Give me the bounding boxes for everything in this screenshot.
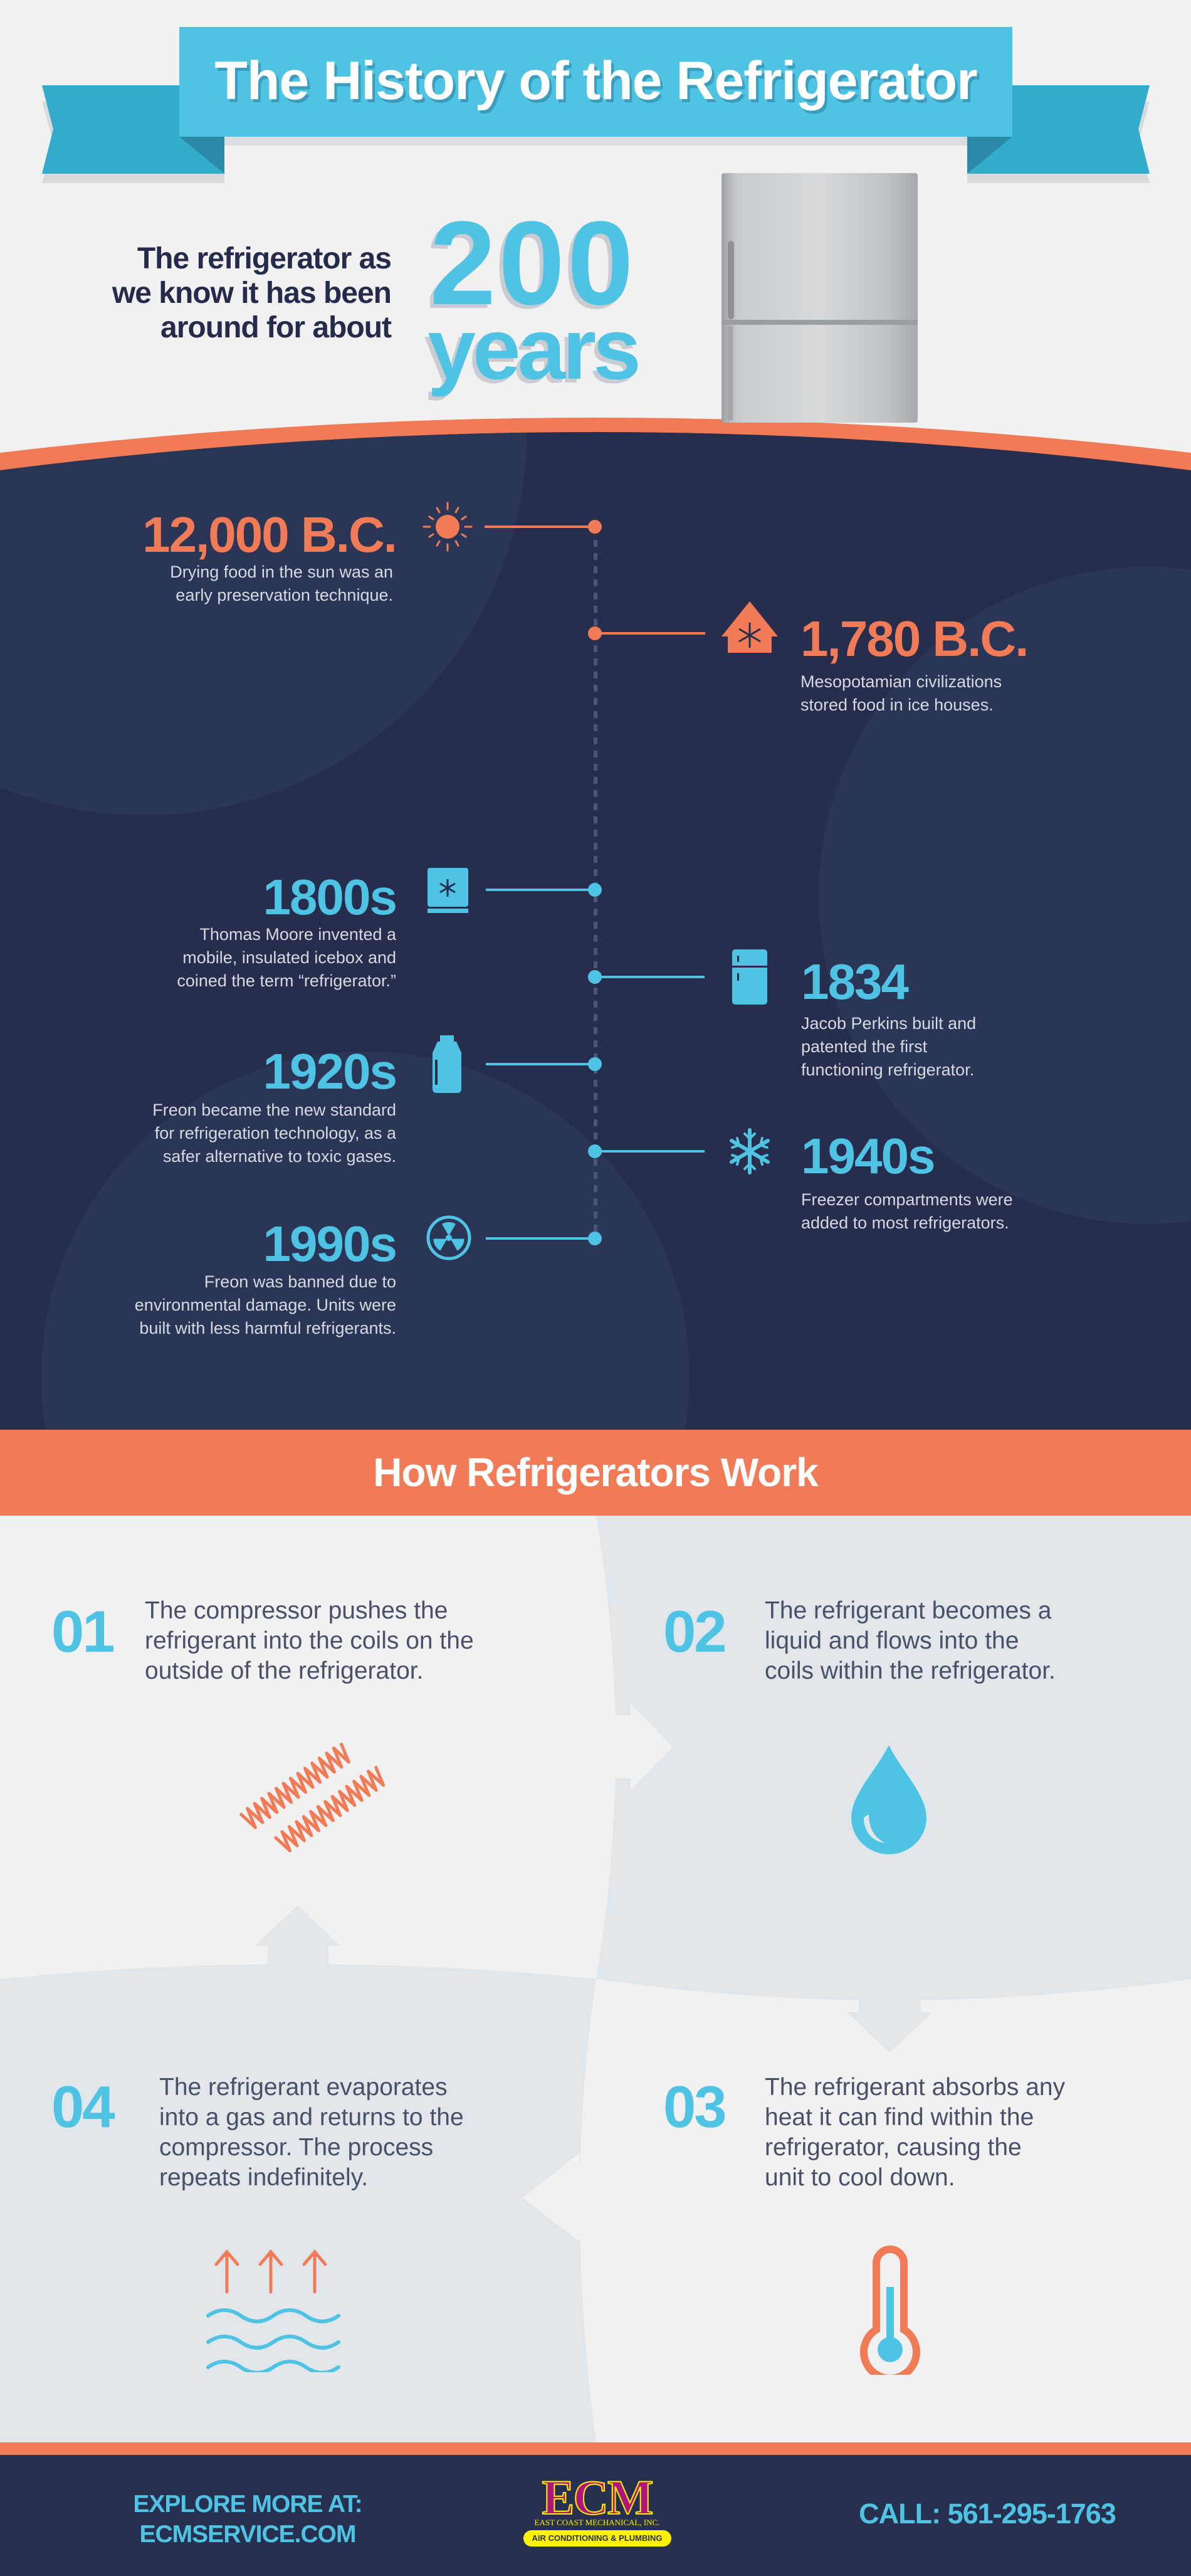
arrow: down bbox=[847, 1994, 933, 2052]
event: 1920s: Freon became the new standard bbox=[152, 1101, 396, 1119]
logo: ECM: ECM bbox=[542, 2470, 652, 2525]
big number: 200 years bbox=[424, 197, 638, 401]
event: 12,000 B.C. bbox=[142, 502, 602, 604]
step 04: compressor. The process bbox=[159, 2134, 433, 2161]
step 02 bbox=[663, 1597, 1056, 1854]
event: 12,000 B.C.: early preservation technique. bbox=[176, 586, 393, 604]
event: 12,000 B.C.: 12,000 B.C. bbox=[142, 507, 396, 562]
navy timeline background bbox=[0, 418, 1191, 1430]
event: 1834 bbox=[588, 949, 976, 1079]
process background quadrants and arrows bbox=[0, 1516, 1191, 2442]
event: 1990s: environmental damage. Units were bbox=[135, 1296, 396, 1314]
event: 1800s: 1800s bbox=[263, 869, 396, 925]
event: 1834: functioning refrigerator. bbox=[801, 1060, 974, 1079]
section header: How Refrigerators Work: How Refrigerators Work bbox=[373, 1450, 818, 1495]
step 01 bbox=[51, 1597, 474, 1852]
event: 12,000 B.C.: Drying food in the sun was an bbox=[170, 562, 393, 581]
logo: ECM: AIR CONDITIONING & PLUMBING bbox=[532, 2533, 662, 2543]
big number: 200 years: years bbox=[428, 301, 638, 398]
icon: snowflake bbox=[732, 1130, 768, 1173]
intro text: The refrigerator as bbox=[137, 242, 391, 275]
event: 1834: Jacob Perkins built and bbox=[801, 1014, 976, 1033]
event: 1940s: 1940s bbox=[801, 1128, 934, 1184]
event: 1800s: Thomas Moore invented a bbox=[199, 925, 396, 944]
footer: phone: CALL: 561-295-1763 bbox=[859, 2498, 1116, 2530]
event: 1800s: coined the term “refrigerator.” bbox=[177, 971, 396, 990]
event: 1,780 B.C.: stored food in ice houses. bbox=[800, 695, 994, 714]
step 02: The refrigerant becomes a bbox=[765, 1597, 1051, 1624]
event: 1834: patented the first bbox=[801, 1037, 927, 1056]
event: 1920s: for refrigeration technology, as a bbox=[155, 1124, 396, 1143]
step 03: unit to cool down. bbox=[765, 2164, 955, 2191]
icon: fridge bbox=[732, 949, 767, 1005]
event: 1800s: mobile, insulated icebox and bbox=[182, 948, 396, 967]
intro text: around for about bbox=[160, 311, 391, 344]
event: 1,780 B.C. bbox=[588, 601, 1027, 714]
event: 1800s bbox=[177, 868, 602, 990]
step 01: refrigerant into the coils on the bbox=[145, 1627, 474, 1654]
event: 1990s: Freon was banned due to bbox=[204, 1272, 396, 1291]
fridge image bbox=[721, 173, 918, 423]
logo: ECM: EAST COAST MECHANICAL, INC. bbox=[535, 2518, 659, 2527]
icon: ice house bbox=[721, 601, 778, 653]
event: 1,780 B.C.: 1,780 B.C. bbox=[800, 611, 1027, 667]
event: 1990s: 1990s bbox=[263, 1216, 396, 1272]
icon: water drop bbox=[851, 1745, 926, 1854]
intro text bbox=[112, 242, 391, 344]
section header: How Refrigerators Work bbox=[0, 1430, 1191, 1516]
timeline: dotted spine bbox=[594, 533, 597, 1232]
arrow: left bbox=[523, 2153, 589, 2242]
step 03: 03 bbox=[663, 2074, 725, 2140]
icon: gas bottle bbox=[433, 1035, 602, 1093]
icon: sun bbox=[422, 502, 602, 552]
step 01: outside of the refrigerator. bbox=[145, 1657, 423, 1684]
step 04: The refrigerant evaporates bbox=[159, 2074, 448, 2101]
event: 1940s bbox=[588, 1128, 1013, 1232]
event: 1920s bbox=[152, 1035, 602, 1166]
step 03: heat it can find within the bbox=[765, 2104, 1034, 2131]
event: 1940s: Freezer compartments were bbox=[801, 1190, 1013, 1209]
step 02: liquid and flows into the bbox=[765, 1627, 1019, 1654]
icon: radiation bbox=[426, 1215, 602, 1260]
step 02: 02 bbox=[663, 1598, 725, 1664]
event: 1940s: added to most refrigerators. bbox=[801, 1213, 1009, 1232]
footer bbox=[0, 2442, 1191, 2576]
icon: coils bbox=[239, 1742, 385, 1852]
banner: title ribbon bbox=[42, 27, 1150, 183]
step 04: into a gas and returns to the bbox=[159, 2104, 464, 2131]
event: 1834: 1834 bbox=[801, 954, 908, 1010]
title: The History of the Refrigerator bbox=[214, 51, 977, 111]
footer: website: ECMSERVICE.COM bbox=[139, 2521, 356, 2548]
event: 1990s bbox=[135, 1215, 602, 1338]
step 04: 04 bbox=[51, 2074, 113, 2140]
step 03 bbox=[663, 2074, 1065, 2375]
big number: 200 years: 200 bbox=[429, 197, 636, 330]
arrow: up bbox=[254, 1906, 340, 1969]
arrow: right bbox=[611, 1703, 673, 1790]
event: 1,780 B.C.: Mesopotamian civilizations bbox=[800, 672, 1002, 691]
icon: icebox bbox=[428, 868, 602, 913]
footer: website: EXPLORE MORE AT: bbox=[133, 2491, 362, 2518]
logo: ECM bbox=[523, 2470, 671, 2547]
step 03: refrigerator, causing the bbox=[765, 2134, 1022, 2161]
event: 1990s: built with less harmful refrigerants. bbox=[139, 1319, 396, 1338]
icon: thermometer bbox=[860, 2246, 920, 2375]
step 04 bbox=[51, 2074, 464, 2372]
step 01: 01 bbox=[51, 1598, 113, 1664]
event: 1920s: 1920s bbox=[263, 1043, 396, 1099]
step 03: The refrigerant absorbs any bbox=[765, 2074, 1065, 2101]
step 04: repeats indefinitely. bbox=[159, 2164, 368, 2191]
footer: website bbox=[133, 2491, 362, 2548]
intro text: we know it has been bbox=[112, 277, 391, 310]
icon: evaporation bbox=[206, 2249, 340, 2372]
step 01: The compressor pushes the bbox=[145, 1597, 448, 1624]
event: 1920s: safer alternative to toxic gases. bbox=[163, 1147, 396, 1166]
step 02: coils within the refrigerator. bbox=[765, 1657, 1056, 1684]
